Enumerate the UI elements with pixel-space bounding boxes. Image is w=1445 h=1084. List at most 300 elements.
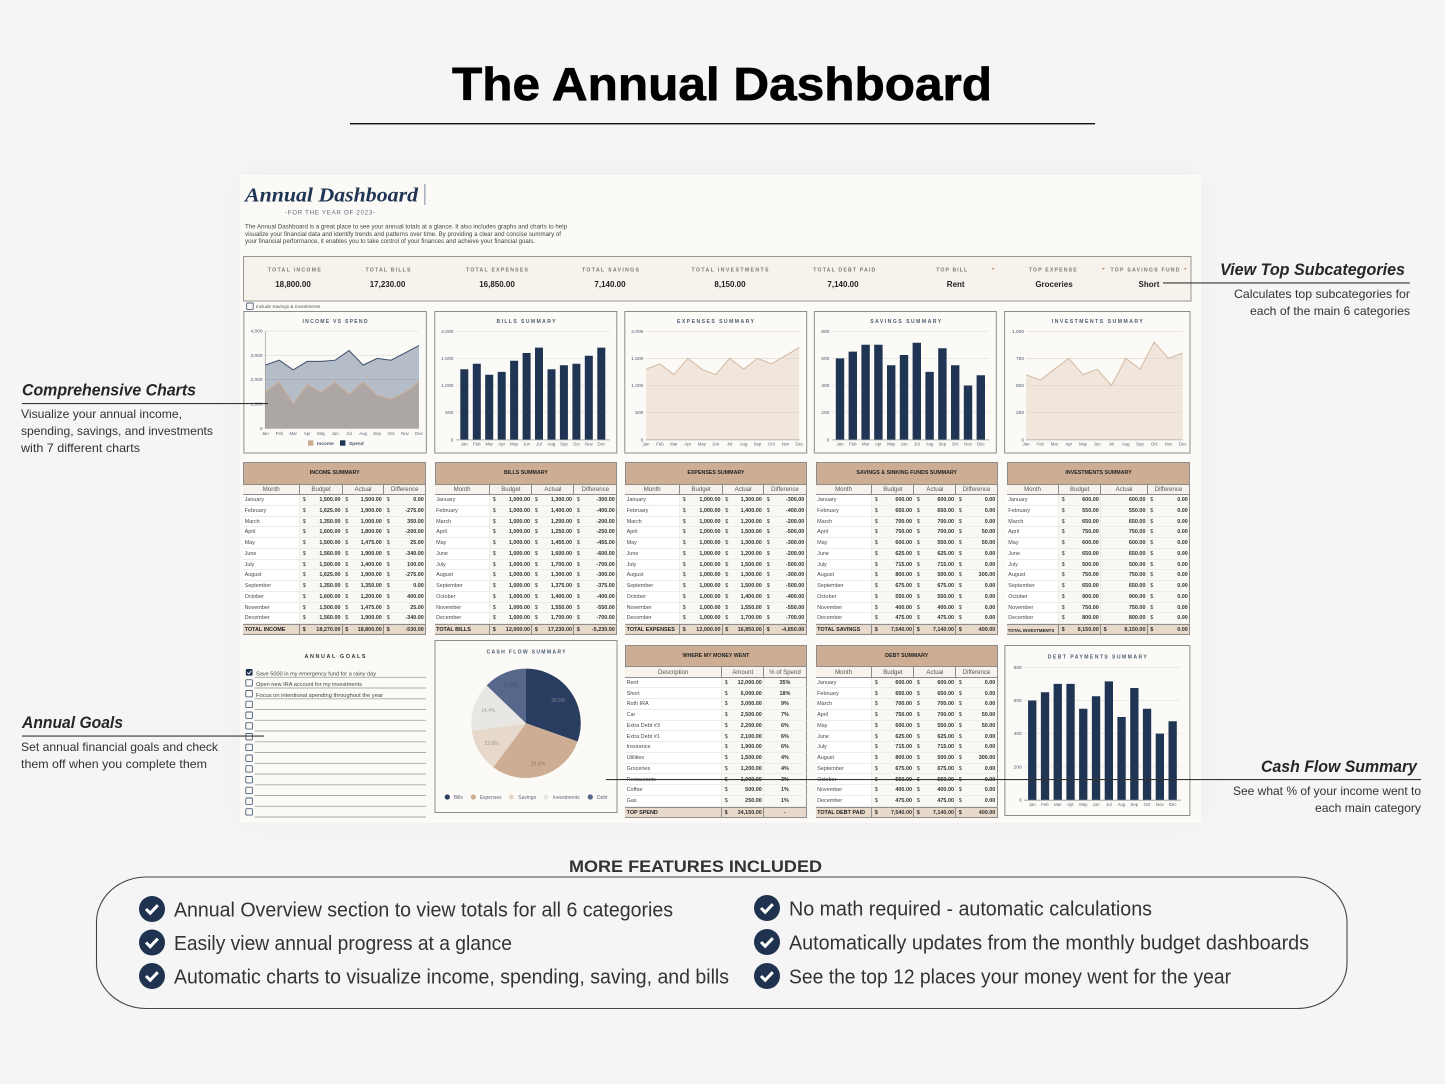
chart: savings summary <box>814 312 996 453</box>
table: bills summary: $ <box>535 572 538 578</box>
table: savings and sinking funds summary: $ <box>875 519 878 525</box>
table: bills summary: 1,000.00 <box>509 519 530 525</box>
table: expenses summary: -200.00 <box>786 519 804 525</box>
table: income summary: 0.00 <box>413 583 424 589</box>
table: where my money went: 250.00 <box>745 798 762 804</box>
chart: income vs spend: 4,000 <box>250 329 263 335</box>
table: income summary: 1,350.00 <box>319 583 340 589</box>
table: expenses summary: $ <box>725 605 728 611</box>
table: investments summary: $ <box>1150 615 1153 621</box>
table: where my money went: 35% <box>780 680 790 686</box>
table: where my money went: Insurance <box>627 744 650 750</box>
chart: income vs spend: 3,000 <box>250 353 263 359</box>
chart: debt payments summary <box>1005 646 1190 816</box>
table: debt summary: $ <box>917 798 920 804</box>
table: where my money went: Car <box>627 712 635 718</box>
table: debt summary: TOTAL DEBT PAID <box>817 810 865 816</box>
table: expenses summary: 1,500.00 <box>741 529 762 535</box>
chart: income vs spend: May <box>317 431 326 436</box>
table: income summary: 1,600.00 <box>319 594 340 600</box>
table: savings and sinking funds summary: $ <box>917 605 920 611</box>
table: income summary: $ <box>303 508 306 514</box>
table: income summary: $ <box>387 508 390 514</box>
table: investments summary: 0.00 <box>1177 594 1188 600</box>
chart: debt payments summary: Jun <box>1093 802 1100 807</box>
chart: debt payments summary: Sep <box>1130 802 1139 807</box>
table: expenses summary: $ <box>767 615 770 621</box>
table: investments summary: 8,150.00 <box>1124 627 1145 633</box>
table: savings and sinking funds summary: $ <box>959 594 962 600</box>
table: bills summary: March <box>436 519 451 525</box>
table: expenses summary: $ <box>725 594 728 600</box>
chart: debt payments summary: Oct <box>1144 802 1151 807</box>
table: income summary: Actual <box>355 486 372 493</box>
table: where my money went: Extra Debt #1 <box>627 734 660 740</box>
table: debt summary: Budget <box>883 669 903 676</box>
table: debt summary: $ <box>917 744 920 750</box>
table: income summary: 1,560.00 <box>319 551 340 557</box>
table: income summary: 1,000.00 <box>361 519 382 525</box>
chart: income vs spend: Jan <box>262 431 269 436</box>
table: bills summary: $ <box>577 508 580 514</box>
table: debt summary: 0.00 <box>985 798 995 804</box>
table: expenses summary: $ <box>725 562 728 568</box>
table: expenses summary: October <box>627 594 646 600</box>
table: where my money went: $ <box>725 712 728 718</box>
table: expenses summary: -200.00 <box>786 551 804 557</box>
table: expenses summary: Difference <box>771 486 799 493</box>
table: income summary: November <box>245 605 270 611</box>
chart: expenses summary: Aug <box>740 442 748 446</box>
table: expenses summary: Month <box>644 486 661 493</box>
table: bills summary: April <box>436 529 447 535</box>
table: investments summary: 650.00 <box>1129 519 1145 525</box>
chart: investments summary: Sep <box>1136 442 1144 446</box>
chart: savings summary: 400 <box>821 383 830 389</box>
table: income summary: 1,500.00 <box>319 605 340 611</box>
table: savings and sinking funds summary: Actual <box>926 486 943 493</box>
chart: savings summary: Feb <box>849 442 857 446</box>
feature: annual overview: Annual Overview section to view totals for all 6 categories <box>174 900 673 922</box>
chart: debt payments summary: Nov <box>1156 802 1164 807</box>
chart: bills summary: Jun <box>523 442 531 446</box>
table: investments summary: 0.00 <box>1177 529 1188 535</box>
table: expenses summary: $ <box>683 605 686 611</box>
table: debt summary: $ <box>959 701 962 707</box>
table: where my money went: 18% <box>780 691 790 697</box>
callout: comprehensive charts <box>20 380 268 455</box>
table: debt summary: 0.00 <box>985 777 995 783</box>
table: debt summary: $ <box>917 755 920 761</box>
feature: automatic updates: Automatically updates from the monthly budget dashboards <box>789 932 1309 954</box>
features panel <box>96 877 1347 1008</box>
table: debt summary: $ <box>875 755 878 761</box>
table: expenses summary: $ <box>767 562 770 568</box>
table: where my money went: 3% <box>781 777 789 783</box>
chart: cash flow pie: Debt <box>597 795 608 801</box>
table: savings and sinking funds summary: 300.00 <box>979 572 995 578</box>
table: income summary: 1,900.00 <box>361 508 382 514</box>
table: bills summary: 1,000.00 <box>509 594 530 600</box>
table: bills summary: $ <box>535 594 538 600</box>
table: savings and sinking funds summary: 475.00 <box>937 615 954 621</box>
table: income summary: 1,625.00 <box>319 508 340 514</box>
table: investments summary: September <box>1008 583 1035 589</box>
table: bills summary: -300.00 <box>596 572 615 578</box>
table: savings and sinking funds summary: June <box>817 551 829 557</box>
table: bills summary: February <box>436 508 458 514</box>
table: debt summary: Month <box>835 669 852 676</box>
table: where my money went: $ <box>725 777 728 783</box>
table: where my money went: 2,500.00 <box>741 712 762 718</box>
table: bills summary: Actual <box>544 486 561 493</box>
table: income summary: 25.00 <box>410 540 424 546</box>
table: savings and sinking funds summary: May <box>817 540 827 546</box>
table: debt summary: 0.00 <box>985 766 995 772</box>
table: income summary: $ <box>345 572 348 578</box>
table: savings and sinking funds summary: Difference <box>963 486 990 493</box>
table: bills summary: 12,000.00 <box>506 627 530 633</box>
chart: savings summary: SAVINGS SUMMARY <box>870 319 942 325</box>
chart: income vs spend: Feb <box>276 431 284 436</box>
table: income summary: $ <box>345 562 348 568</box>
table: savings and sinking funds summary: 700.00 <box>937 529 954 535</box>
table: expenses summary: 1,000.00 <box>699 572 720 578</box>
table: expenses summary: Budget <box>691 486 711 493</box>
table: debt summary: March <box>817 701 832 707</box>
table: bills summary: $ <box>493 519 496 525</box>
table: where my money went: $ <box>725 766 728 772</box>
table: debt summary: August <box>817 755 834 761</box>
table: expenses summary <box>625 462 807 635</box>
table: investments summary: 750.00 <box>1082 529 1099 535</box>
table: debt summary: Difference <box>963 669 990 676</box>
chart: bills summary: Dec <box>597 442 606 446</box>
callout: comprehensive charts: spending, savings, and investments <box>21 424 213 438</box>
table: expenses summary: 1,400.00 <box>741 594 762 600</box>
table: income summary: $ <box>387 497 390 503</box>
chart: debt payments summary: Jul <box>1106 802 1112 807</box>
chart: bills summary: Mar <box>485 442 493 446</box>
chart: expenses summary: Dec <box>795 442 804 446</box>
table: expenses summary: -500.00 <box>786 562 804 568</box>
table: savings and sinking funds summary: 0.00 <box>985 551 995 557</box>
table: debt summary: 625.00 <box>895 734 912 740</box>
table: savings and sinking funds summary: $ <box>917 508 920 514</box>
table: bills summary: $ <box>577 627 580 633</box>
table: investments summary: 650.00 <box>1082 519 1099 525</box>
table: debt summary: 600.00 <box>895 723 912 729</box>
chart: investments summary: Jan <box>1023 442 1030 446</box>
table: investments summary: 600.00 <box>1082 497 1099 503</box>
chart: expenses summary: Feb <box>656 442 664 446</box>
table: bills summary: 1,550.00 <box>551 605 572 611</box>
callout: view top subcategories: Calculates top subcategories for <box>1234 287 1410 301</box>
chart: bills summary: 1,500 <box>441 356 454 362</box>
table: savings and sinking funds summary: $ <box>875 594 878 600</box>
chart: bills summary: Nov <box>585 442 593 446</box>
table: debt summary: 800.00 <box>895 755 912 761</box>
KPI summary band: 7,140.00 <box>594 280 626 289</box>
table: expenses summary: -300.00 <box>786 497 804 503</box>
table: bills summary: -600.00 <box>596 551 615 557</box>
table: expenses summary: August <box>627 572 644 578</box>
table: debt summary: 475.00 <box>895 798 912 804</box>
table: bills summary: 1,375.00 <box>551 583 572 589</box>
table: bills summary: $ <box>493 540 496 546</box>
chart: expenses summary: Oct <box>768 442 776 446</box>
table: where my money went: 6% <box>781 734 789 740</box>
chart: income vs spend: Jun <box>332 431 339 436</box>
table: income summary: $ <box>345 605 348 611</box>
table: debt summary: $ <box>917 734 920 740</box>
table: investments summary: 0.00 <box>1177 562 1188 568</box>
table: income summary <box>243 462 426 635</box>
table: debt summary: $ <box>875 723 878 729</box>
table: savings and sinking funds summary: January <box>817 497 836 503</box>
chart: income vs spend <box>244 312 426 453</box>
chart: debt payments summary: Mar <box>1054 802 1062 807</box>
table: bills summary: $ <box>493 583 496 589</box>
chart: income vs spend: 1,000 <box>250 402 263 408</box>
table: expenses summary: January <box>627 497 646 503</box>
table: savings and sinking funds summary: $ <box>875 508 878 514</box>
table: income summary: -275.00 <box>405 508 424 514</box>
table: expenses summary: -400.00 <box>786 508 804 514</box>
table: bills summary: 1,300.00 <box>551 572 572 578</box>
table: debt summary: $ <box>875 766 878 772</box>
table: expenses summary: -500.00 <box>786 529 804 535</box>
table: savings and sinking funds summary: $ <box>959 529 962 535</box>
callout: view top subcategories: each of the main 6 categories <box>1250 304 1410 318</box>
table: savings and sinking funds summary: $ <box>875 529 878 535</box>
table: income summary: $ <box>303 529 306 535</box>
table: income summary: $ <box>345 594 348 600</box>
table: income summary: TOTAL INCOME <box>245 627 285 633</box>
table: income summary: INCOME SUMMARY <box>310 470 360 476</box>
callout: view top subcategories: View Top Subcategories <box>1220 260 1405 279</box>
table: debt summary: DEBT SUMMARY <box>885 653 928 659</box>
chart: savings summary: Jan <box>837 442 844 446</box>
table: income summary: $ <box>303 497 306 503</box>
table: income summary: $ <box>303 551 306 557</box>
table: debt summary: 0.00 <box>985 691 995 697</box>
table: expenses summary: $ <box>725 551 728 557</box>
table: savings and sinking funds summary: $ <box>875 540 878 546</box>
table: bills summary: -200.00 <box>596 519 615 525</box>
table: investments summary: October <box>1008 594 1028 600</box>
table: bills summary: 1,000.00 <box>509 605 530 611</box>
table: income summary: 1,600.00 <box>319 529 340 535</box>
table: debt summary: 400.00 <box>979 810 995 816</box>
table: investments summary: 750.00 <box>1082 605 1099 611</box>
table: investments summary: Difference <box>1155 486 1182 493</box>
table: savings and sinking funds summary: $ <box>917 497 920 503</box>
table: savings and sinking funds summary: $ <box>917 562 920 568</box>
table: expenses summary: February <box>627 508 648 514</box>
chart: investments summary <box>1005 312 1190 453</box>
table: debt summary: $ <box>875 744 878 750</box>
table: expenses summary: -4,850.00 <box>781 627 804 633</box>
table: investments summary: $ <box>1062 540 1065 546</box>
table: savings and sinking funds summary: 0.00 <box>985 594 995 600</box>
table: savings and sinking funds summary: $ <box>959 627 962 633</box>
chart: cash flow pie <box>435 640 617 812</box>
table: expenses summary: $ <box>683 627 686 633</box>
table: debt summary: 550.00 <box>895 777 912 783</box>
table: savings and sinking funds summary: 50.00 <box>982 529 995 535</box>
KPI summary band: Short <box>1139 280 1160 289</box>
table: income summary: 1,625.00 <box>319 572 340 578</box>
chart: investments summary: Nov <box>1165 442 1173 446</box>
table: where my money went: Description <box>658 669 688 676</box>
table: bills summary: $ <box>535 627 538 633</box>
table: savings and sinking funds summary: 400.00 <box>979 627 995 633</box>
annual goals checklist: Focus on intentional spending throughout the year <box>256 693 383 699</box>
table: bills summary: 1,000.00 <box>509 551 530 557</box>
table: income summary: $ <box>303 594 306 600</box>
table: expenses summary: $ <box>767 551 770 557</box>
table: investments summary: 500.00 <box>1129 562 1145 568</box>
table: investments summary: December <box>1008 615 1033 621</box>
table: investments summary: 0.00 <box>1177 551 1188 557</box>
chart: income vs spend: 2,000 <box>250 377 263 383</box>
feature: no math: No math required - automatic calculations <box>789 898 1152 920</box>
table: income summary: April <box>245 529 255 535</box>
table: investments summary: 900.00 <box>1082 594 1099 600</box>
table: investments summary: February <box>1008 508 1030 514</box>
table: income summary: $ <box>387 594 390 600</box>
table: bills summary <box>435 462 617 635</box>
table: income summary: 1,400.00 <box>361 562 382 568</box>
table: expenses summary: $ <box>725 497 728 503</box>
table: investments summary: 650.00 <box>1129 583 1145 589</box>
table: expenses summary: May <box>627 540 637 546</box>
table: income summary: February <box>245 508 266 514</box>
table: where my money went: Roth IRA <box>627 701 649 707</box>
table: where my money went: Rent <box>627 680 638 686</box>
table: income summary: 100.00 <box>407 562 424 568</box>
table: expenses summary: 16,850.00 <box>738 627 762 633</box>
table: income summary: July <box>245 562 254 568</box>
table: where my money went: Gas <box>627 798 637 804</box>
table: investments summary: $ <box>1150 497 1153 503</box>
table: expenses summary: -400.00 <box>786 594 804 600</box>
table: where my money went: $ <box>725 810 728 816</box>
table: debt summary: $ <box>875 777 878 783</box>
table: savings and sinking funds summary: $ <box>959 572 962 578</box>
table: bills summary: May <box>436 540 446 546</box>
callout: cash flow summary: See what % of your income went to <box>1233 784 1421 798</box>
table: income summary: $ <box>345 508 348 514</box>
table: investments summary: $ <box>1062 562 1065 568</box>
table: debt summary: 50.00 <box>982 712 995 718</box>
chart: savings summary: 800 <box>821 329 830 335</box>
table: investments summary: $ <box>1150 529 1153 535</box>
table: bills summary: -455.00 <box>596 540 615 546</box>
table: savings and sinking funds summary: 7,140.00 <box>933 627 954 633</box>
annual goals checklist: Save 5000 in my emergency fund for a rainy day <box>256 671 376 677</box>
table: debt summary: 0.00 <box>985 787 995 793</box>
table: investments summary: $ <box>1062 583 1065 589</box>
table: investments summary: 0.00 <box>1177 497 1188 503</box>
table: debt summary: 50.00 <box>982 723 995 729</box>
table: bills summary: $ <box>535 551 538 557</box>
table: expenses summary: 1,500.00 <box>741 583 762 589</box>
table: where my money went: 1,200.00 <box>741 766 762 772</box>
table: savings and sinking funds summary: $ <box>959 508 962 514</box>
table: debt summary: $ <box>875 680 878 686</box>
table: expenses summary: $ <box>725 540 728 546</box>
table: bills summary: January <box>436 497 455 503</box>
chart: income vs spend: Apr <box>304 431 311 436</box>
table: bills summary: $ <box>493 594 496 600</box>
table: bills summary: 1,000.00 <box>509 583 530 589</box>
table: savings and sinking funds summary: July <box>817 562 827 568</box>
table: savings and sinking funds summary: 800.00 <box>895 572 912 578</box>
table: income summary: 1,900.00 <box>361 572 382 578</box>
table: income summary: 1,900.00 <box>361 615 382 621</box>
chart: investments summary: May <box>1079 442 1088 446</box>
table: income summary: $ <box>303 540 306 546</box>
chart: expenses summary: Jan <box>643 442 650 446</box>
table: income summary: $ <box>387 519 390 525</box>
KPI summary band: TOTAL BILLS <box>366 268 411 274</box>
table: income summary: $ <box>345 627 348 633</box>
KPI summary band: TOTAL EXPENSES <box>466 268 529 274</box>
chart: savings summary: Jul <box>914 442 920 446</box>
dashboard description <box>245 224 567 245</box>
table: savings and sinking funds summary: 500.00 <box>937 572 954 578</box>
table: investments summary: 750.00 <box>1129 605 1145 611</box>
table: bills summary: Budget <box>501 486 521 493</box>
chart: income vs spend: 0 <box>260 426 263 432</box>
table: savings and sinking funds summary: $ <box>959 562 962 568</box>
table: savings and sinking funds summary: $ <box>917 551 920 557</box>
table: income summary: -275.00 <box>405 572 424 578</box>
table: expenses summary: $ <box>767 540 770 546</box>
table: expenses summary: $ <box>767 529 770 535</box>
table: debt summary: $ <box>917 701 920 707</box>
chart: investments summary: Jun <box>1094 442 1101 446</box>
table: savings and sinking funds summary: 0.00 <box>985 605 995 611</box>
table: savings and sinking funds summary: 700.00 <box>937 519 954 525</box>
table: debt summary: December <box>817 798 842 804</box>
KPI summary band: 17,230.00 <box>370 280 406 289</box>
table: bills summary: $ <box>577 562 580 568</box>
table: investments summary: 600.00 <box>1129 540 1145 546</box>
table: expenses summary: 1,200.00 <box>741 551 762 557</box>
table: savings and sinking funds summary: 7,540.00 <box>891 627 912 633</box>
table: income summary: 400.00 <box>407 594 424 600</box>
table: debt summary: 715.00 <box>895 744 912 750</box>
table: savings and sinking funds summary: $ <box>875 551 878 557</box>
table: expenses summary: $ <box>767 497 770 503</box>
table: income summary: March <box>245 519 260 525</box>
table: debt summary: 7,140.00 <box>933 810 954 816</box>
table: expenses summary: $ <box>767 572 770 578</box>
table: debt summary: $ <box>917 810 920 816</box>
table: bills summary: Month <box>454 486 471 493</box>
table: bills summary: $ <box>493 572 496 578</box>
table: bills summary: $ <box>535 583 538 589</box>
table: income summary: $ <box>345 519 348 525</box>
table: debt summary: $ <box>959 680 962 686</box>
table: savings and sinking funds summary: $ <box>917 519 920 525</box>
table: income summary: $ <box>345 540 348 546</box>
table: where my money went: 9% <box>781 701 789 707</box>
table: savings and sinking funds summary: $ <box>875 497 878 503</box>
